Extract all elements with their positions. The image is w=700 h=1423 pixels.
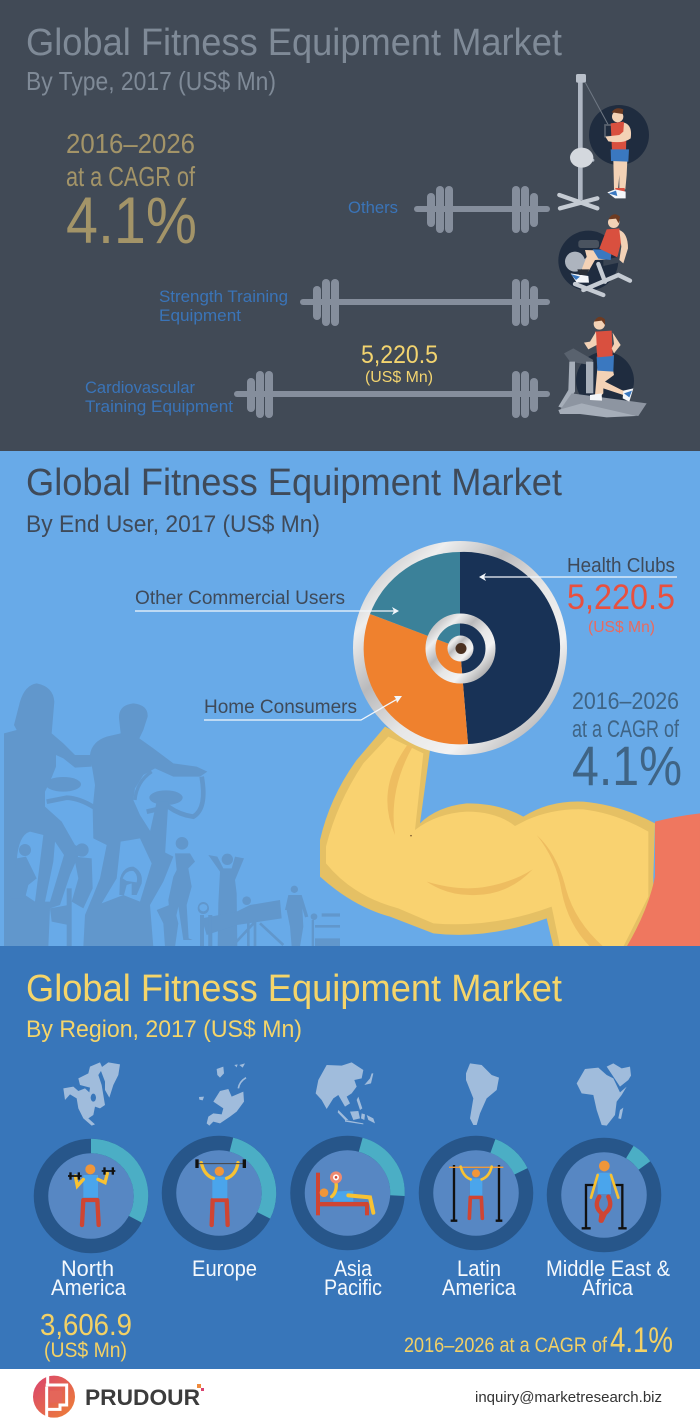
- title: by region: Global Fitness Equipment Market: [26, 968, 562, 1010]
- callout: CAGR: [572, 688, 682, 797]
- value: health clubs: (US$ Mn): [588, 619, 655, 636]
- map: europe: [199, 1063, 246, 1126]
- map: latin america: [466, 1063, 499, 1125]
- title: by end user: Global Fitness Equipment Market: [26, 462, 562, 504]
- label: north america: [51, 1256, 127, 1300]
- label: asia pacific: [324, 1256, 382, 1300]
- label: north america: America: [51, 1275, 127, 1300]
- label: strength training: Strength Training: [159, 288, 288, 306]
- label: health clubs: [479, 555, 677, 581]
- callout: CAGR: 2016–2026: [66, 128, 195, 159]
- label: health clubs: Health Clubs: [567, 555, 675, 577]
- label: asia pacific: Asia: [334, 1256, 373, 1281]
- pie slice: home consumers: [364, 614, 468, 744]
- label: europe: Europe: [192, 1256, 257, 1281]
- value: cardiovascular: [361, 341, 438, 386]
- icon: treadmill runner: [558, 317, 647, 417]
- label: latin america: [442, 1256, 517, 1300]
- section: by region: [0, 946, 700, 1369]
- logo: Prudour: [33, 1375, 204, 1418]
- footer: [0, 1369, 700, 1423]
- label: home consumers: [204, 696, 402, 720]
- callout: CAGR: 4.1%: [66, 183, 197, 257]
- label: cardiovascular: Training Equipment: [85, 398, 233, 416]
- label: asia pacific: Pacific: [324, 1275, 382, 1300]
- callout: CAGR: [66, 128, 197, 257]
- barbell: cardiovascular: [234, 371, 550, 418]
- label: other commercial users: [135, 588, 399, 615]
- label: middle east and africa: Middle East &: [546, 1256, 670, 1281]
- barbell: others: [414, 186, 550, 233]
- icon: shoulder press: [68, 1164, 115, 1225]
- label: latin america: Latin: [457, 1256, 501, 1281]
- label: cardiovascular: Cardiovascular: [85, 379, 196, 397]
- callout: CAGR: 2016–2026 at a CAGR of: [404, 1334, 607, 1357]
- title: by type: Global Fitness Equipment Market: [26, 22, 562, 64]
- value: north america: 3,606.9: [40, 1307, 132, 1342]
- callout: CAGR: 4.1%: [572, 734, 682, 797]
- donut: middle east and africa: [554, 1145, 654, 1245]
- donut: europe: [169, 1143, 269, 1243]
- callout: CAGR: 4.1%: [610, 1321, 673, 1360]
- value: north america: (US$ Mn): [44, 1339, 127, 1362]
- pie slice: health clubs: [460, 552, 560, 744]
- label: north america: North: [61, 1256, 114, 1281]
- label: strength training: [159, 288, 288, 325]
- icon: overhead lift: [195, 1159, 246, 1225]
- donut: north america: [41, 1146, 141, 1246]
- icon: bench press: [316, 1171, 373, 1215]
- section: by type: [0, 0, 700, 451]
- pie slice: other commercial users: [370, 552, 460, 648]
- icon: parallel bar dip: [582, 1161, 627, 1228]
- icon: pull-up: [449, 1165, 503, 1221]
- icon: leg press athlete: [558, 214, 630, 295]
- logo: Prudour: PRUDOUR: [85, 1385, 200, 1410]
- value: north america: [40, 1307, 132, 1362]
- callout: CAGR: at a CAGR of: [66, 161, 195, 192]
- label: other commercial users: Other Commercial Users: [135, 588, 345, 609]
- map: middle east and africa: [577, 1063, 631, 1126]
- donut: latin america: [426, 1143, 526, 1243]
- callout: CAGR: [404, 1321, 673, 1360]
- value: health clubs: [567, 578, 675, 636]
- barbell: strength training: [300, 279, 550, 326]
- value: cardiovascular: 5,220.5: [361, 341, 438, 369]
- subtitle: by end user: By End User, 2017 (US$ Mn): [26, 511, 320, 538]
- section: by end user: [0, 451, 700, 947]
- label: strength training: Equipment: [159, 307, 241, 325]
- contact email: inquiry@marketresearch.biz: [475, 1390, 662, 1406]
- label: middle east and africa: [546, 1256, 670, 1300]
- label: middle east and africa: Africa: [582, 1275, 634, 1300]
- subtitle: by region: By Region, 2017 (US$ Mn): [26, 1016, 302, 1043]
- subtitle: by type: By Type, 2017 (US$ Mn): [26, 66, 276, 96]
- icon: cable machine athlete: [559, 74, 649, 208]
- illustration: flexing arm: [320, 727, 700, 947]
- value: health clubs: 5,220.5: [567, 578, 675, 617]
- value: cardiovascular: (US$ Mn): [365, 369, 433, 386]
- label: home consumers: Home Consumers: [204, 697, 357, 718]
- label: others: Others: [348, 199, 398, 217]
- label: latin america: America: [442, 1275, 517, 1300]
- donut: asia pacific: [298, 1143, 398, 1243]
- map: north america: [63, 1062, 120, 1126]
- label: cardiovascular: [85, 379, 233, 416]
- silhouette: distant gym figures: [198, 854, 340, 947]
- chart: weight plate pie: [353, 541, 567, 755]
- map: asia pacific: [316, 1062, 375, 1124]
- silhouette: gym-goers on exercise bikes: [4, 683, 212, 947]
- callout: CAGR: 2016–2026: [572, 688, 679, 715]
